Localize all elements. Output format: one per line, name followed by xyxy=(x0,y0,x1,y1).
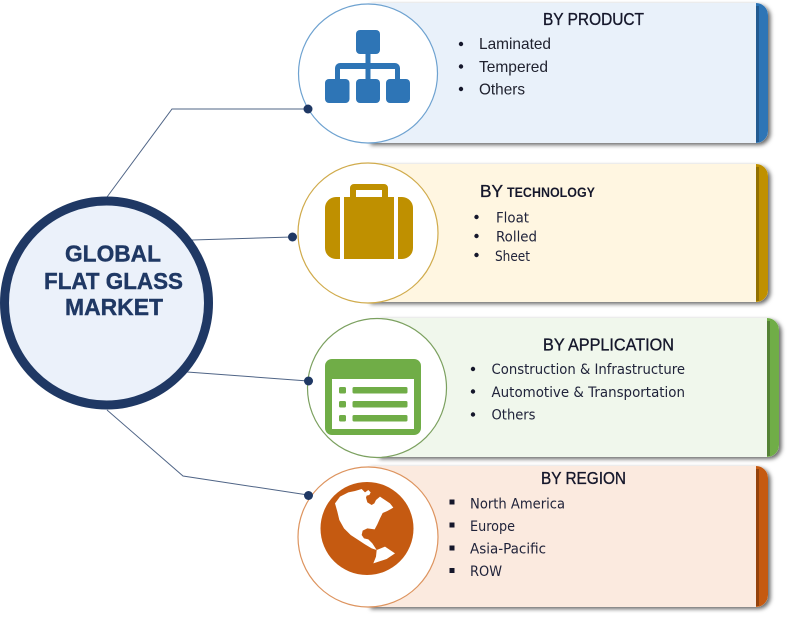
list: applications: Construction & Infrastructure xyxy=(492,362,685,378)
icon circle: application xyxy=(308,318,446,458)
list: products: Others xyxy=(479,82,525,98)
title: GLOBAL xyxy=(65,240,161,266)
heading: by region: BY REGION xyxy=(541,468,626,488)
icon: globe xyxy=(320,482,414,575)
heading: by technology xyxy=(480,181,595,201)
panel: by product xyxy=(298,3,768,143)
list: products: Tempered xyxy=(479,59,548,76)
list: applications: Automotive & Transportation xyxy=(492,385,685,401)
panel: by region xyxy=(298,466,768,607)
central circle: global flat glass market xyxy=(4,201,208,405)
title xyxy=(44,240,183,320)
connector: product xyxy=(107,104,312,197)
list: regions: Asia-Pacific xyxy=(470,542,546,558)
panel: by application xyxy=(308,318,779,458)
icon circle: technology xyxy=(298,163,438,303)
icon circle: product xyxy=(298,4,438,143)
icon: hierarchy xyxy=(325,30,410,103)
list: regions xyxy=(450,496,565,580)
icon: list window xyxy=(325,359,421,435)
title: MARKET xyxy=(65,294,163,320)
list: regions: ROW xyxy=(470,564,502,580)
list: applications: Others xyxy=(492,408,536,424)
list: regions: Europe xyxy=(470,519,515,535)
connector: technology xyxy=(192,232,297,242)
list: technologies: Float xyxy=(496,210,529,226)
list: technologies: Sheet xyxy=(495,249,530,265)
heading: by technology: TECHNOLOGY xyxy=(507,185,595,200)
heading: by product: BY PRODUCT xyxy=(543,9,644,29)
list: regions: North America xyxy=(470,496,565,512)
list: applications xyxy=(471,362,685,424)
list: products xyxy=(459,36,551,98)
heading: by application: BY APPLICATION xyxy=(543,334,674,354)
heading: by technology: BY xyxy=(480,181,503,201)
list: products: Laminated xyxy=(479,36,551,53)
connector: application xyxy=(187,372,313,386)
icon: suitcase xyxy=(325,184,413,259)
list: technologies xyxy=(474,210,537,265)
icon circle: region xyxy=(298,467,438,607)
connector: region xyxy=(107,410,313,500)
title: FLAT GLASS xyxy=(44,268,183,294)
panel: by technology xyxy=(298,163,768,303)
list: technologies: Rolled xyxy=(496,230,537,246)
